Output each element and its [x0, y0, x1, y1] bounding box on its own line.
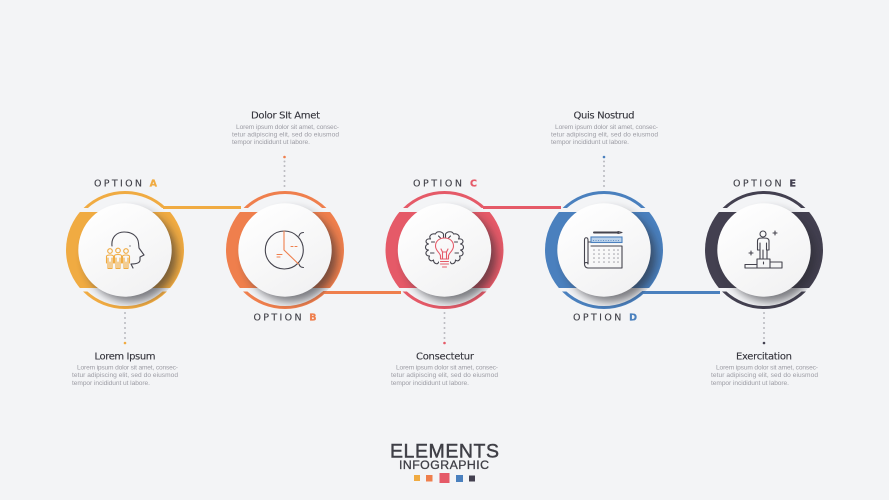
text block: Consectetur: tetur adipiscing elit, sed do eiusmod — [391, 372, 498, 379]
text block: Quis Nostrud — [551, 110, 658, 146]
text block: Dolor SIt Amet: tetur adipiscing elit, sed do eiusmod — [232, 132, 339, 138]
text block: Consectetur: tempor incididunt ut labore. — [391, 380, 469, 387]
dotted leader E — [763, 312, 765, 344]
text block: Exercitation: Exercitation — [736, 352, 792, 362]
icon: person on podium — [745, 231, 782, 268]
label: option B: OPTION B — [254, 312, 316, 324]
dotted leader A — [124, 312, 126, 344]
label: option D: OPTION D — [573, 312, 637, 324]
text block: Lorem Ipsum: Lorem Ipsum — [94, 352, 156, 362]
icon: head with people — [106, 232, 144, 268]
text block: Quis Nostrud: tetur adipiscing elit, sed do eiusmod — [551, 132, 658, 138]
text block: Dolor SIt Amet — [232, 110, 339, 146]
connector: A to B — [163, 206, 241, 209]
text block: Lorem Ipsum — [72, 352, 178, 387]
icon: brain with lightbulb — [426, 232, 464, 267]
text block: Exercitation: Lorem ipsum dolor sit amet, consec- — [716, 364, 818, 372]
step circle D — [545, 191, 663, 309]
text block: Lorem Ipsum: Lorem ipsum dolor sit amet, consec- — [77, 364, 178, 372]
text block: Consectetur: Consectetur — [416, 352, 475, 362]
text block: Quis Nostrud: tempor incididunt ut labore. — [551, 139, 629, 146]
text block: Exercitation: tempor incididunt ut labore. — [711, 380, 789, 387]
connector: B to C — [323, 291, 401, 294]
text block: Lorem Ipsum: tempor incididunt ut labore. — [72, 380, 150, 387]
logo: INFOGRAPHIC — [399, 458, 489, 472]
connector: C to D — [483, 206, 561, 209]
logo — [390, 440, 499, 483]
dotted leader C — [443, 312, 446, 344]
text block: Consectetur — [391, 352, 498, 387]
step circle E — [705, 191, 823, 309]
step circle A — [66, 191, 184, 309]
text block: Exercitation — [711, 352, 818, 387]
dotted leader D — [603, 156, 605, 187]
text block: Lorem Ipsum: tetur adipiscing elit, sed do eiusmod — [72, 372, 178, 379]
logo: ELEMENTS — [390, 440, 499, 462]
text block: Dolor SIt Amet: Dolor SIt Amet — [251, 110, 320, 122]
text block: Dolor SIt Amet: Lorem ipsum dolor sit amet, consec- — [236, 124, 339, 131]
icon: pie chart — [265, 231, 304, 269]
text block: Quis Nostrud: Lorem ipsum dolor sit amet, consec- — [555, 124, 658, 131]
label: option E: OPTION E — [733, 178, 796, 189]
text block: Exercitation: tetur adipiscing elit, sed do eiusmod — [711, 372, 818, 379]
label: option A: OPTION A — [94, 178, 158, 189]
dotted leader B — [283, 156, 286, 187]
icon: calendar plan — [584, 232, 622, 268]
step circle C — [386, 191, 504, 309]
text block: Quis Nostrud: Quis Nostrud — [574, 110, 634, 122]
step circle B — [226, 191, 344, 309]
text block: Consectetur: Lorem ipsum dolor sit amet, consec- — [396, 364, 498, 372]
connector: D to E — [642, 291, 720, 294]
label: option C: OPTION C — [413, 178, 477, 189]
text block: Dolor SIt Amet: tempor incididunt ut labore. — [232, 139, 310, 146]
